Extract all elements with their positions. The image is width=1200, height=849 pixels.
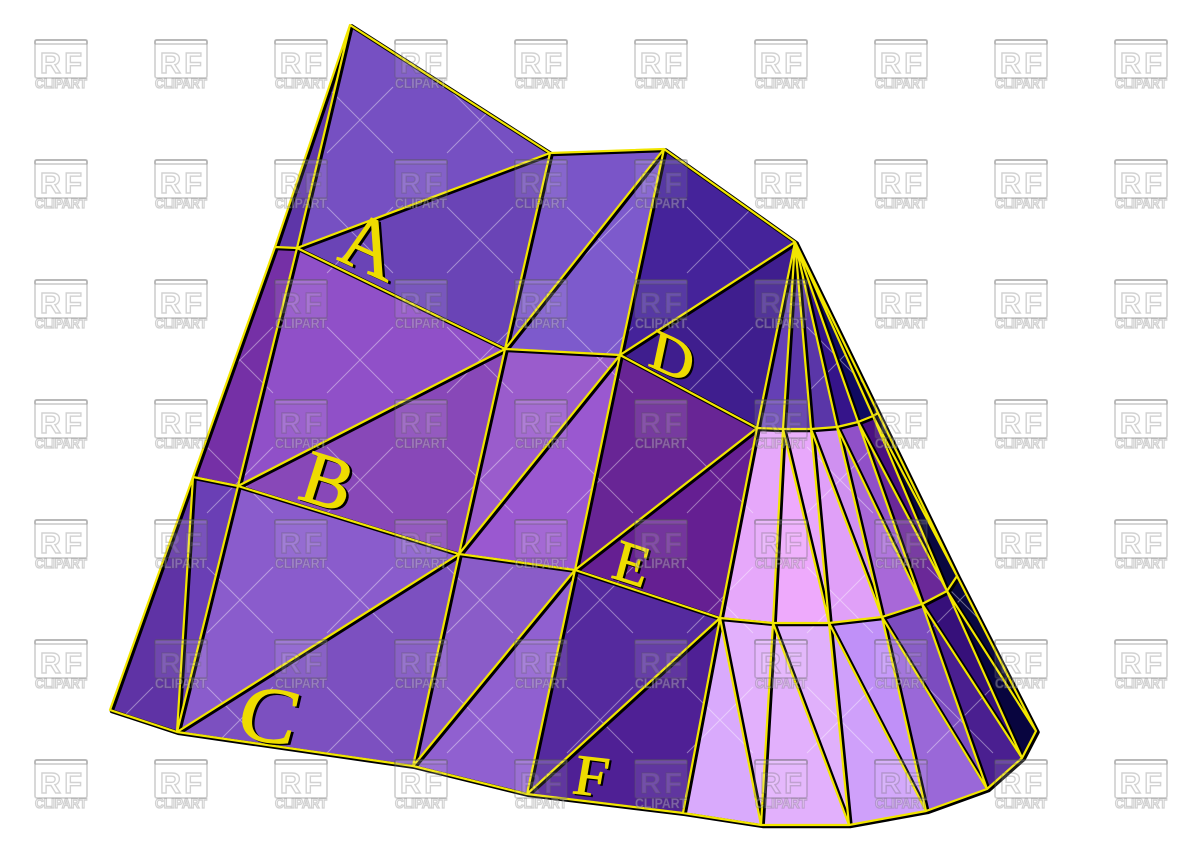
watermark grid: CLIPART (395, 316, 448, 331)
wireframe edges: yellow lines (110, 25, 1036, 825)
watermark grid: CLIPART (875, 436, 928, 451)
watermark grid: RF (640, 48, 682, 80)
watermark grid: RF (640, 648, 682, 680)
watermark grid: CLIPART (755, 556, 808, 571)
polyhedral shape (87, 25, 1038, 826)
watermark grid: RF (520, 528, 562, 560)
watermark grid: CLIPART (155, 76, 208, 91)
watermark grid: CLIPART (275, 556, 328, 571)
watermark grid: CLIPART (155, 556, 208, 571)
left edge strip faces (110, 25, 350, 732)
watermark grid: RF (1120, 768, 1162, 800)
watermark grid: RF (160, 768, 202, 800)
watermark grid: CLIPART (755, 796, 808, 811)
watermark grid: RF (520, 408, 562, 440)
watermark grid: RF (640, 168, 682, 200)
watermark grid: CLIPART (635, 436, 688, 451)
watermark grid: CLIPART (395, 196, 448, 211)
watermark grid: CLIPART (395, 436, 448, 451)
cone bottom band faces (683, 576, 1036, 825)
watermark grid: CLIPART (35, 316, 88, 331)
watermark grid: CLIPART (395, 676, 448, 691)
watermark grid: RF (280, 288, 322, 320)
watermark grid: CLIPART (395, 76, 448, 91)
watermark grid: CLIPART (1115, 556, 1168, 571)
watermark grid: CLIPART (155, 316, 208, 331)
watermark grid: CLIPART (995, 316, 1048, 331)
watermark grid: RF (880, 648, 922, 680)
watermark grid: RF (1000, 48, 1042, 80)
watermark grid: RF (400, 168, 442, 200)
watermark grid: RF (1000, 768, 1042, 800)
watermark grid: RF (640, 288, 682, 320)
watermark grid: RF (40, 768, 82, 800)
watermark grid: CLIPART (275, 196, 328, 211)
watermark grid: RF (160, 648, 202, 680)
watermark grid: CLIPART (875, 556, 928, 571)
watermark grid: CLIPART (1115, 196, 1168, 211)
watermark grid: CLIPART (155, 436, 208, 451)
label E: E (607, 527, 657, 601)
watermark grid: RF (1000, 408, 1042, 440)
watermark grid: CLIPART (875, 676, 928, 691)
watermark grid: RF (760, 528, 802, 560)
watermark grid: RF (160, 288, 202, 320)
wireframe edges: black shadow (112, 26, 1038, 826)
watermark grid: RF (40, 48, 82, 80)
label F: F (571, 744, 616, 811)
label A: A (331, 191, 406, 300)
watermark grid: RF (880, 528, 922, 560)
watermark grid: RF (280, 768, 322, 800)
watermark grid: RF (520, 168, 562, 200)
watermark grid: CLIPART (515, 196, 568, 211)
watermark grid: CLIPART (635, 796, 688, 811)
cone middle band faces (720, 413, 957, 623)
watermark grid: RF (1000, 288, 1042, 320)
watermark grid: RF (40, 408, 82, 440)
watermark grid: CLIPART (1115, 796, 1168, 811)
watermark grid: CLIPART (635, 316, 688, 331)
watermark grid: RF (280, 48, 322, 80)
watermark grid: CLIPART (1115, 76, 1168, 91)
watermark grid: RF (40, 288, 82, 320)
watermark grid: CLIPART (155, 196, 208, 211)
watermark grid: CLIPART (875, 76, 928, 91)
watermark grid: CLIPART (875, 196, 928, 211)
watermark grid: RF (880, 48, 922, 80)
watermark grid: RF (880, 288, 922, 320)
watermark grid: RF (520, 648, 562, 680)
watermark grid: RF (400, 48, 442, 80)
watermark grid: CLIPART (635, 196, 688, 211)
watermark grid: RF (640, 768, 682, 800)
watermark grid: RF (880, 768, 922, 800)
watermark grid: RF (40, 528, 82, 560)
watermark grid: CLIPART (275, 436, 328, 451)
watermark grid: RF (1000, 168, 1042, 200)
label D: D (644, 317, 700, 397)
watermark grid: CLIPART (275, 676, 328, 691)
watermark grid: RF (640, 528, 682, 560)
watermark grid: CLIPART (995, 556, 1048, 571)
watermark grid: CLIPART (1115, 436, 1168, 451)
watermark grid: RF (1000, 648, 1042, 680)
watermark grid: RF (760, 648, 802, 680)
watermark grid: CLIPART (515, 556, 568, 571)
watermark grid: RF (760, 408, 802, 440)
label F: F (569, 742, 614, 809)
watermark grid: RF (280, 528, 322, 560)
watermark grid: CLIPART (755, 676, 808, 691)
top row faces (297, 25, 795, 428)
label D: D (646, 318, 702, 399)
watermark grid: RF (280, 408, 322, 440)
watermark grid: RF (400, 768, 442, 800)
label E: E (609, 528, 659, 602)
watermark grid: CLIPART (995, 196, 1048, 211)
watermark grid: CLIPART (35, 556, 88, 571)
label B: B (293, 436, 367, 531)
watermark grid: RF (880, 168, 922, 200)
watermark grid: CLIPART (515, 796, 568, 811)
watermark grid: CLIPART (755, 436, 808, 451)
watermark grid: RF (520, 288, 562, 320)
watermark grid: CLIPART (395, 556, 448, 571)
watermark grid: RF (1120, 528, 1162, 560)
watermark grid: CLIPART (515, 676, 568, 691)
watermark grid: RF (400, 408, 442, 440)
watermark grid: RF (40, 168, 82, 200)
watermark grid: CLIPART (995, 676, 1048, 691)
watermark grid: CLIPART (995, 436, 1048, 451)
watermark grid: RF (520, 48, 562, 80)
label C: C (232, 670, 312, 764)
bottom row faces (177, 486, 720, 813)
watermark grid: RF (760, 168, 802, 200)
watermark grid: CLIPART (1115, 676, 1168, 691)
watermark grid: CLIPART (35, 196, 88, 211)
watermark grid: RF (760, 48, 802, 80)
watermark grid: CLIPART (395, 796, 448, 811)
watermark grid: RF (520, 768, 562, 800)
watermark grid: CLIPART (755, 316, 808, 331)
middle row faces (238, 248, 757, 618)
watermark grid: CLIPART (275, 796, 328, 811)
watermark grid: RF (160, 48, 202, 80)
watermark grid: RF (40, 648, 82, 680)
watermark grid: RF (760, 768, 802, 800)
watermark grid: RF (280, 168, 322, 200)
label C: C (230, 669, 309, 763)
watermark grid: RF (760, 288, 802, 320)
watermark grid: RF (1120, 648, 1162, 680)
watermark grid: CLIPART (755, 76, 808, 91)
watermark grid: CLIPART (35, 676, 88, 691)
watermark grid: CLIPART (35, 436, 88, 451)
watermark grid: CLIPART (275, 76, 328, 91)
watermark grid: RF (1000, 528, 1042, 560)
watermark grid: RF (400, 288, 442, 320)
watermark grid: CLIPART (155, 676, 208, 691)
watermark grid: RF (880, 408, 922, 440)
watermark grid: CLIPART (515, 436, 568, 451)
watermark grid: RF (280, 648, 322, 680)
label A: A (334, 192, 408, 302)
watermark grid: RF (400, 528, 442, 560)
watermark grid: CLIPART (35, 76, 88, 91)
watermark grid: CLIPART (635, 76, 688, 91)
cone top band faces (757, 242, 878, 429)
watermark grid: RF (400, 648, 442, 680)
watermark grid: CLIPART (875, 316, 928, 331)
watermark grid: CLIPART (1115, 316, 1168, 331)
watermark grid: RF (160, 408, 202, 440)
watermark grid: CLIPART (515, 76, 568, 91)
watermark grid: CLIPART (995, 76, 1048, 91)
watermark grid: RF (1120, 408, 1162, 440)
watermark grid: RF (1120, 48, 1162, 80)
watermark grid: CLIPART (35, 796, 88, 811)
watermark grid: CLIPART (155, 796, 208, 811)
label B: B (291, 434, 365, 529)
watermark grid: RF (640, 408, 682, 440)
watermark grid: RF (1120, 288, 1162, 320)
watermark grid: RF (1120, 168, 1162, 200)
watermark grid: CLIPART (635, 676, 688, 691)
watermark grid: CLIPART (755, 196, 808, 211)
watermark grid: CLIPART (635, 556, 688, 571)
watermark grid: CLIPART (275, 316, 328, 331)
watermark grid: RF (160, 528, 202, 560)
watermark grid: CLIPART (995, 796, 1048, 811)
watermark grid: CLIPART (875, 796, 928, 811)
watermark grid: RF (160, 168, 202, 200)
watermark grid: CLIPART (515, 316, 568, 331)
